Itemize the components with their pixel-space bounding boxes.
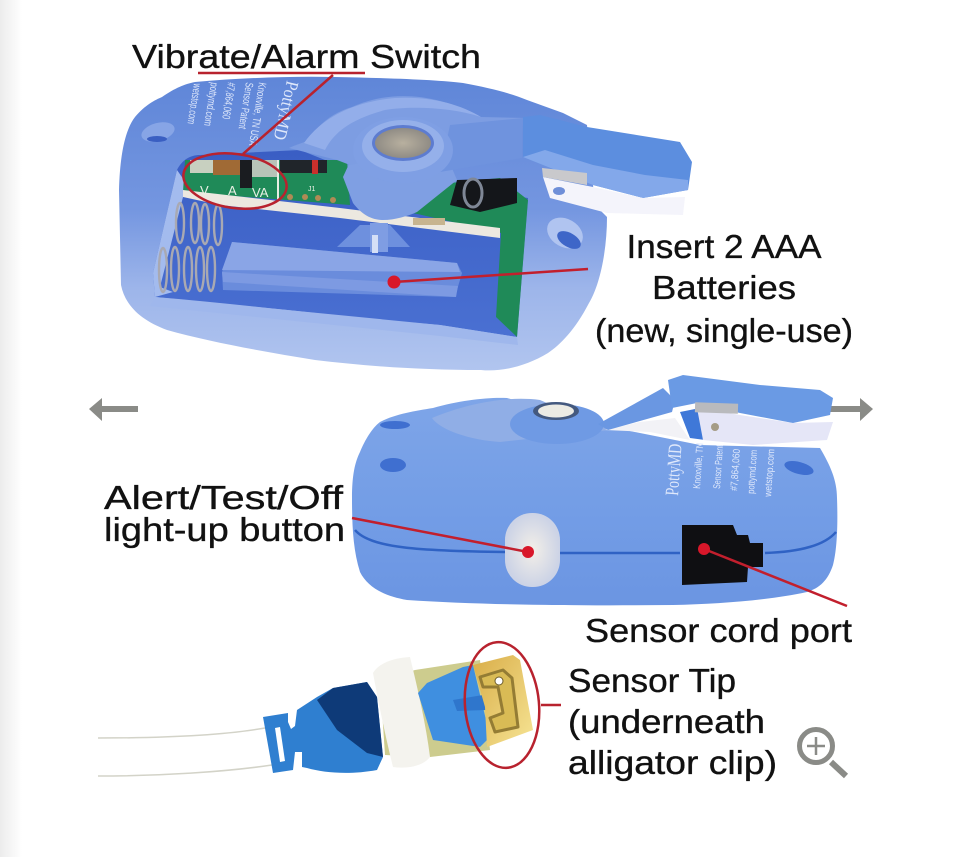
front wall — [150, 297, 518, 345]
brand text: pottymd.com — [201, 82, 220, 127]
switch labels: A — [228, 183, 237, 198]
brand text — [662, 443, 777, 498]
switch labels: J1 — [308, 186, 316, 193]
inner left wall — [153, 170, 184, 297]
wires — [98, 728, 272, 776]
switch components — [190, 160, 445, 225]
switch labels: VA — [252, 185, 269, 200]
text: sensor tip — [568, 662, 777, 781]
switch labels — [200, 183, 316, 200]
text: alert button: light-up button — [104, 511, 345, 548]
brand text: Knoxville, TN USA — [246, 82, 268, 147]
panel: sensor tip — [98, 655, 533, 776]
seam line — [355, 530, 836, 553]
arrow: right — [825, 398, 873, 421]
sensor strip — [380, 660, 490, 757]
white collar — [373, 657, 430, 768]
device body — [352, 398, 837, 605]
panel: open device with battery compartment — [119, 77, 692, 370]
title: vibrate alarm switch: Vibrate/Alarm Switch — [132, 38, 481, 75]
text: sensor tip: alligator clip) — [568, 744, 777, 781]
callout: batteries leader — [388, 269, 588, 288]
top recess — [432, 399, 610, 442]
text: alert button: Alert/Test/Off — [104, 479, 344, 516]
battery cavity — [153, 150, 528, 337]
circuit board left — [183, 160, 350, 205]
alligator clip — [668, 375, 833, 423]
white board edge — [183, 190, 500, 238]
callout: sensor ring — [460, 639, 561, 771]
text: insert batteries: Insert 2 AAA — [626, 228, 822, 265]
brand text: wetstop.com — [763, 449, 777, 498]
brand text: #7,864,060 — [729, 448, 743, 491]
button disc — [353, 117, 453, 183]
text: sensor tip: Sensor Tip — [568, 662, 736, 699]
light-up button — [505, 513, 560, 587]
white clip — [697, 408, 833, 445]
text: insert batteries: (new, single-use) — [595, 312, 853, 349]
springs — [159, 203, 222, 292]
hinge disc — [510, 404, 604, 444]
brand text — [185, 79, 303, 147]
switch labels: V — [200, 183, 209, 198]
hinge ridge — [289, 96, 527, 165]
text: insert batteries: Batteries — [652, 269, 796, 306]
brand text: Sensor Patent — [236, 82, 255, 130]
callout: port leader — [698, 543, 847, 606]
top holes — [380, 421, 410, 429]
arm — [440, 118, 523, 172]
screw hole left — [139, 119, 177, 145]
clip arm — [598, 388, 675, 430]
gap under arm — [605, 418, 690, 440]
callout: button leader — [352, 518, 534, 558]
text: insert batteries — [595, 228, 853, 349]
gold tip — [473, 655, 533, 747]
connector slot — [275, 727, 285, 762]
brand text: Knoxville, TN — [692, 443, 706, 489]
panel: closed device side view — [352, 375, 837, 605]
text: sensor tip: (underneath — [568, 703, 765, 740]
arrow: left — [89, 398, 138, 421]
hinge cup — [343, 140, 457, 220]
battery tray — [222, 242, 462, 297]
blue clip tab — [418, 665, 490, 747]
text: alert button — [104, 479, 345, 548]
brand text: #7,864,060 — [219, 82, 237, 120]
circuit board right — [413, 178, 528, 337]
brand text: pottymd.com — [746, 450, 760, 494]
device body — [119, 77, 607, 370]
callout: switch leader line and ring — [180, 73, 365, 215]
brand text: wetstop.com — [185, 82, 203, 125]
text: sensor cord port: Sensor cord port — [585, 612, 852, 649]
connector — [263, 682, 383, 773]
brand text: PottyMD — [662, 443, 687, 496]
brand text: Sensor Patent — [712, 444, 726, 489]
dark components — [450, 178, 517, 212]
brand text: PottyMD — [270, 79, 303, 142]
alligator clip — [523, 115, 692, 198]
icon: zoom magnifier — [800, 730, 846, 776]
screw hole right — [542, 211, 588, 255]
blue under-clip — [680, 408, 705, 440]
sensor cord port — [682, 525, 763, 585]
